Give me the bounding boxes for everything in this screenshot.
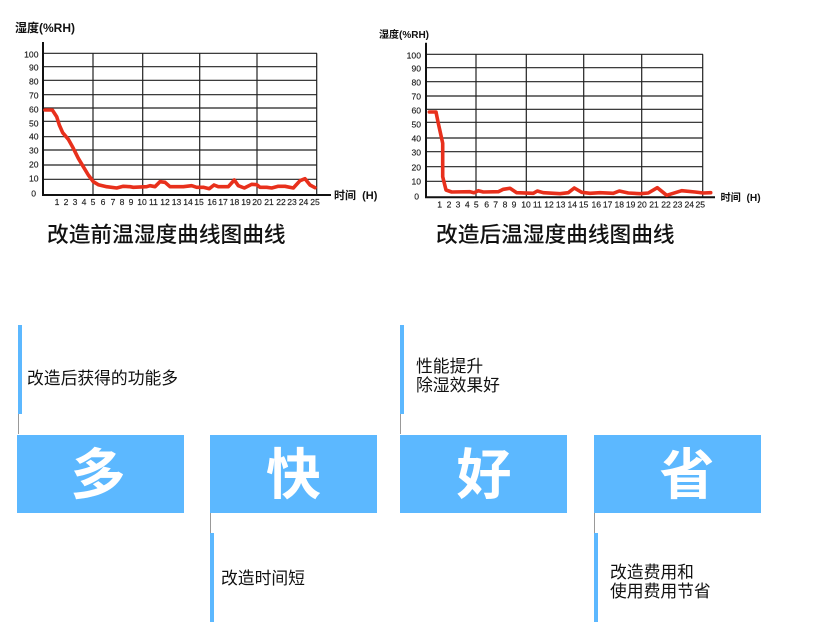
panel: good <box>400 325 567 513</box>
x axis labels: 15 <box>579 200 589 210</box>
accent bar <box>18 325 22 414</box>
y axis labels: 0 <box>414 192 419 202</box>
y axis labels: 80 <box>411 78 421 88</box>
y axis labels: 30 <box>411 148 421 158</box>
accent bar <box>210 533 214 622</box>
description: 使用费用节省 <box>610 581 711 601</box>
x axis labels: 22 <box>276 197 286 207</box>
connector line <box>400 414 401 434</box>
y axis labels: 60 <box>411 106 421 116</box>
x axis labels: 12 <box>544 200 554 210</box>
y axis labels: 50 <box>29 118 39 128</box>
y axis labels: 90 <box>29 62 39 72</box>
x axis labels: 19 <box>241 197 251 207</box>
x axis labels: 23 <box>673 200 683 210</box>
y axis labels: 40 <box>29 132 39 142</box>
x axis labels: 7 <box>111 197 116 207</box>
x axis labels: 12 <box>160 197 170 207</box>
panel: fast <box>210 435 377 622</box>
y axis labels: 70 <box>29 90 39 100</box>
description: 改造费用和 <box>610 563 694 582</box>
x axis labels: 15 <box>194 197 204 207</box>
keyword box <box>594 435 761 513</box>
y axis labels: 30 <box>29 146 39 156</box>
keyword: 多 <box>70 444 126 506</box>
x axis labels: 9 <box>512 200 517 210</box>
x axis labels: 24 <box>685 200 694 210</box>
keyword box <box>400 435 567 513</box>
x axis title: 时间 (H) <box>334 188 378 202</box>
y axis labels: 20 <box>29 160 39 170</box>
x axis labels: 19 <box>626 200 636 210</box>
connector line <box>18 414 19 434</box>
x axis labels: 6 <box>101 197 106 207</box>
accent bar <box>400 325 404 414</box>
keyword: 好 <box>456 444 512 506</box>
keyword box <box>210 435 377 513</box>
x axis labels: 13 <box>556 200 566 210</box>
title: after retrofit chart: 改造后温湿度曲线图曲线 <box>436 222 675 247</box>
y axis labels <box>407 50 421 202</box>
x axis labels: 8 <box>503 200 508 210</box>
x axis labels: 17 <box>218 197 228 207</box>
x axis labels: 8 <box>120 197 125 207</box>
x axis labels: 3 <box>73 197 78 207</box>
x axis labels: 20 <box>252 197 262 207</box>
x axis labels: 24 <box>299 197 308 207</box>
y axis labels: 60 <box>29 104 39 114</box>
x axis labels: 20 <box>637 200 647 210</box>
x axis labels: 1 <box>437 200 442 210</box>
y axis labels: 0 <box>31 188 36 198</box>
y axis labels: 80 <box>29 76 39 86</box>
keyword: 快 <box>266 444 321 506</box>
keyword box <box>17 435 184 513</box>
x axis labels: 17 <box>603 200 613 210</box>
x axis labels: 13 <box>172 197 181 207</box>
y axis labels: 100 <box>407 50 421 60</box>
x axis labels: 18 <box>615 200 624 210</box>
description: 性能提升 <box>416 357 483 376</box>
x axis labels: 4 <box>465 200 470 210</box>
x axis labels: 11 <box>533 200 542 210</box>
x axis labels: 10 <box>137 197 147 207</box>
y axis labels: 100 <box>24 50 39 60</box>
x axis labels: 23 <box>287 197 297 207</box>
x axis labels: 21 <box>649 200 659 210</box>
chart: humidity curve before retrofit <box>15 20 378 207</box>
connector line <box>594 513 595 533</box>
y axis labels <box>24 50 39 198</box>
x axis labels: 16 <box>592 200 601 210</box>
y axis labels: 10 <box>411 176 421 186</box>
panel: save <box>594 435 761 622</box>
description: 除湿效果好 <box>416 376 500 395</box>
x axis labels: 14 <box>568 200 577 210</box>
x axis labels: 10 <box>521 200 531 210</box>
x axis labels: 18 <box>230 197 239 207</box>
keyword: 省 <box>659 444 715 506</box>
x axis labels: 25 <box>696 200 705 210</box>
x axis labels: 22 <box>661 200 671 210</box>
x axis labels: 3 <box>456 200 461 210</box>
panel: more <box>17 325 184 513</box>
x axis labels: 2 <box>447 200 452 210</box>
red humidity curve <box>45 110 315 189</box>
x axis labels: 9 <box>129 197 134 207</box>
connector line <box>210 513 211 533</box>
description: 改造后获得的功能多 <box>27 369 178 388</box>
red humidity curve <box>429 112 711 195</box>
y axis labels: 20 <box>411 162 421 172</box>
x axis labels: 5 <box>91 197 96 207</box>
x axis labels <box>437 200 705 210</box>
y axis labels: 40 <box>411 134 421 144</box>
y axis labels: 10 <box>29 174 39 184</box>
x axis labels: 14 <box>183 197 193 207</box>
y axis labels: 70 <box>411 92 421 102</box>
x axis labels <box>55 197 320 207</box>
x axis labels: 5 <box>474 200 479 210</box>
x axis labels: 25 <box>310 197 320 207</box>
y axis title: 湿度(%RH) <box>15 20 75 35</box>
accent bar <box>594 533 598 622</box>
x axis labels: 1 <box>55 197 60 207</box>
x axis labels: 7 <box>493 200 498 210</box>
y axis labels: 90 <box>411 64 421 74</box>
x axis labels: 16 <box>207 197 217 207</box>
x axis labels: 21 <box>264 197 274 207</box>
x axis title: 时间 (H) <box>720 191 761 204</box>
x axis labels: 2 <box>64 197 69 207</box>
description: 改造时间短 <box>221 569 305 588</box>
chart: humidity curve after retrofit <box>379 28 761 210</box>
y axis labels: 50 <box>411 120 421 130</box>
x axis labels: 6 <box>484 200 489 210</box>
x axis labels: 11 <box>149 197 158 207</box>
y axis title: 湿度(%RH) <box>379 28 429 41</box>
title: before retrofit chart: 改造前温湿度曲线图曲线 <box>47 222 286 247</box>
x axis labels: 4 <box>82 197 87 207</box>
